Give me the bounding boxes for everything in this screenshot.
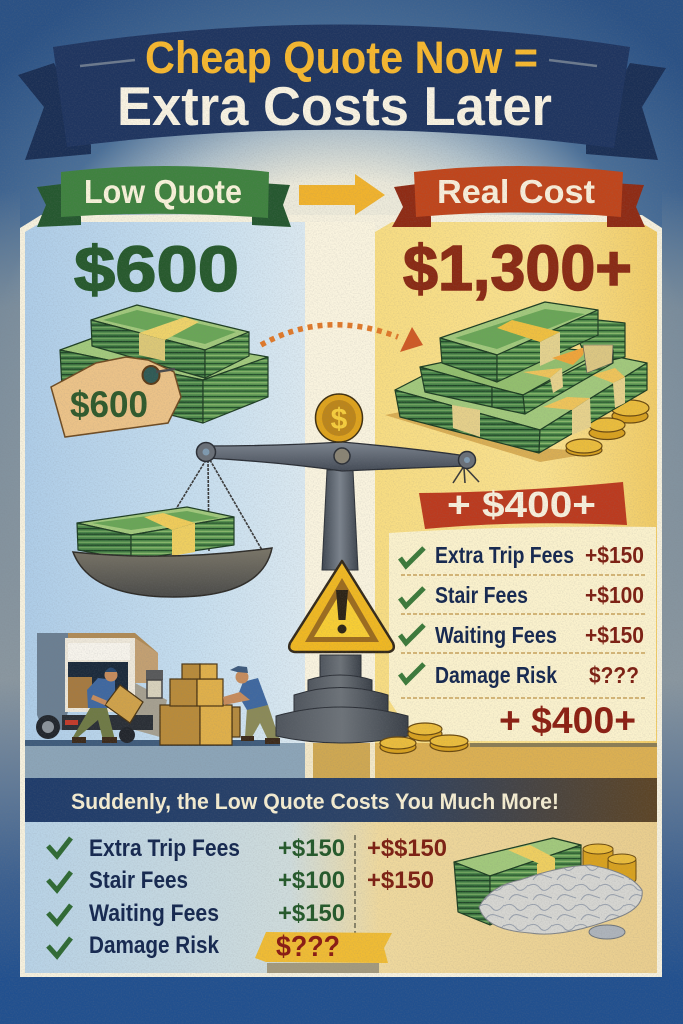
plus 400 banner xyxy=(419,482,627,529)
title line 2: Extra Costs Later xyxy=(117,75,552,137)
icon: left worker xyxy=(72,668,143,743)
ground strip xyxy=(25,740,657,778)
panel: low quote xyxy=(25,222,305,778)
panel: centre column xyxy=(305,222,375,743)
low quote ribbon xyxy=(37,166,291,227)
low quote price: $600 xyxy=(74,233,239,305)
row: extra trip fees xyxy=(400,542,644,568)
row: stair fees xyxy=(400,582,644,608)
stone xyxy=(589,925,625,939)
scale column xyxy=(322,470,358,570)
row: damage risk: Damage Risk xyxy=(435,662,558,688)
row: extra trip fees: +$150 xyxy=(278,835,345,862)
yellow tag xyxy=(255,932,392,963)
icon: price tag xyxy=(51,357,181,437)
row: waiting fees: +$150 xyxy=(278,900,345,927)
icon: delivery truck xyxy=(36,633,167,743)
icon: warning triangle xyxy=(289,561,394,652)
panel: real cost xyxy=(375,222,657,778)
row: waiting fees xyxy=(400,622,644,648)
divider xyxy=(354,835,356,958)
ribbon tail left xyxy=(18,63,91,160)
highlight strip under damage cost xyxy=(267,963,379,973)
arrow: low to real xyxy=(299,174,385,215)
row: stair fees: +$100 xyxy=(585,582,644,608)
middle stack xyxy=(420,345,600,395)
row: extra trip fees: Extra Trip Fees xyxy=(435,542,574,568)
panel: lower fees xyxy=(25,822,657,973)
icon: low quote money stack xyxy=(60,305,268,423)
chains right xyxy=(453,466,479,483)
price tag text: $600 xyxy=(70,384,148,425)
real cost label: Real Cost xyxy=(437,173,595,210)
coin on top xyxy=(316,394,362,442)
icon: money and insulation bag xyxy=(454,838,642,939)
money xyxy=(454,838,581,925)
row: extra trip fees: +$$150 xyxy=(367,835,447,862)
row: stair fees xyxy=(48,867,434,894)
top stack xyxy=(440,302,598,355)
row: waiting fees: Waiting Fees xyxy=(435,622,557,648)
ribbon tail right xyxy=(586,63,666,160)
icon: gold coins right xyxy=(385,400,649,462)
row: stair fees: +$100 xyxy=(278,867,345,894)
plus 400 text: + $400+ xyxy=(447,484,596,525)
row: damage risk xyxy=(400,662,639,688)
bottom footer band xyxy=(0,977,683,1024)
title line 1: Cheap Quote Now = xyxy=(145,32,538,83)
row: damage risk: $??? xyxy=(589,662,639,688)
row: waiting fees: +$150 xyxy=(585,622,644,648)
coin on top: $ xyxy=(331,403,348,436)
banner text: Suddenly, the Low Quote Costs You Much More! xyxy=(71,789,559,814)
icon: balance scale xyxy=(176,394,479,570)
title ribbon xyxy=(18,24,666,160)
bag xyxy=(479,865,642,934)
ribbon body xyxy=(53,24,630,148)
row: extra trip fees: Extra Trip Fees xyxy=(89,835,240,862)
real cost ribbon xyxy=(392,166,645,227)
scale base xyxy=(276,655,408,743)
real cost price: $1,300+ xyxy=(403,232,632,304)
back stack xyxy=(570,320,625,365)
icon: scale pan xyxy=(73,548,272,597)
row: stair fees: +$150 xyxy=(367,867,434,894)
icon: money on pan xyxy=(77,507,234,560)
icon: gold coins bottom xyxy=(380,723,468,754)
low quote label: Low Quote xyxy=(84,173,242,210)
row: extra trip fees: +$150 xyxy=(585,542,644,568)
fee total: + $400+ xyxy=(499,700,636,741)
row: stair fees: Stair Fees xyxy=(435,582,528,608)
coins xyxy=(583,844,636,882)
icon: right worker xyxy=(223,666,280,744)
row: stair fees: Stair Fees xyxy=(89,867,188,894)
chains left xyxy=(176,460,262,552)
row: damage risk: $??? xyxy=(276,931,340,963)
torn band xyxy=(552,347,585,365)
row: waiting fees: Waiting Fees xyxy=(89,900,219,927)
banner: suddenly xyxy=(25,778,657,822)
row: waiting fees xyxy=(48,900,345,927)
panel frame xyxy=(20,215,662,977)
row: damage risk: Damage Risk xyxy=(89,932,219,959)
row: damage risk xyxy=(48,931,340,963)
bottom stack xyxy=(395,356,647,430)
icon: stacked boxes xyxy=(160,664,240,745)
scale beam xyxy=(206,442,467,471)
panel: fee list xyxy=(389,527,656,741)
arrow: dashed curve xyxy=(261,325,423,352)
icon: real cost money pile xyxy=(395,302,647,453)
row: extra trip fees xyxy=(48,835,447,862)
